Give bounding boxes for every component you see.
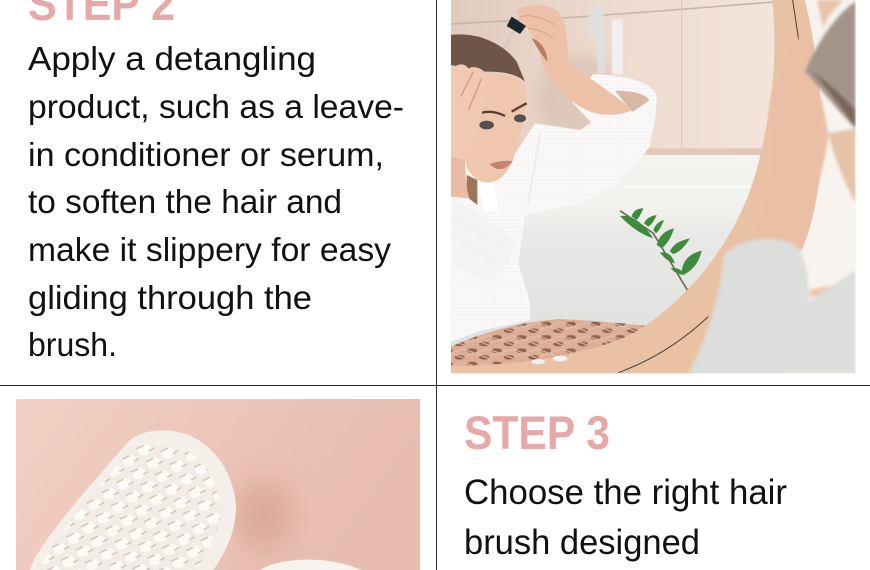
text block: step 3 description: Choose the right hair (464, 473, 787, 512)
divider: vertical (436, 0, 437, 570)
hand on hair (451, 64, 488, 160)
text block: step 2 description (28, 40, 404, 363)
heading: step 3: STEP 3 (464, 406, 610, 459)
text block: step 2 description: brush. (28, 326, 117, 363)
text block: step 2 description: gliding through the (28, 279, 312, 316)
robe cuff (572, 74, 657, 147)
face (465, 73, 526, 183)
text block: step 3 description: brush designed (464, 523, 700, 562)
plant (620, 208, 702, 292)
cuff opening (615, 91, 649, 112)
faucet (593, 10, 623, 74)
neck shadow (467, 175, 477, 205)
foreground person (688, 0, 856, 373)
text block: step 2 description: make it slippery for easy (28, 231, 391, 268)
robe body (451, 122, 650, 342)
rattan seat (451, 319, 647, 366)
second brush (260, 560, 362, 570)
text block: step 3 description (464, 473, 787, 562)
brush shadow (233, 478, 293, 552)
white brush (30, 430, 236, 570)
eyes and brows (479, 103, 527, 169)
dropper (502, 16, 526, 50)
text block: step 2 description: Apply a detangling (28, 40, 316, 77)
bathtub (451, 215, 784, 374)
text block: step 2 description: in conditioner or serum, (28, 136, 384, 173)
photo: hair brushes on pink background (16, 399, 420, 570)
divider: horizontal (0, 385, 870, 386)
photo: woman applying serum in mirror (451, 0, 856, 373)
mirror frame (451, 0, 822, 373)
wall tiles (451, 0, 784, 155)
hair (451, 34, 525, 82)
raised arm and hand (516, 5, 632, 115)
text block: step 2 description: product, such as a leave- (28, 88, 404, 125)
text block: step 2 description: to soften the hair and (28, 183, 342, 220)
